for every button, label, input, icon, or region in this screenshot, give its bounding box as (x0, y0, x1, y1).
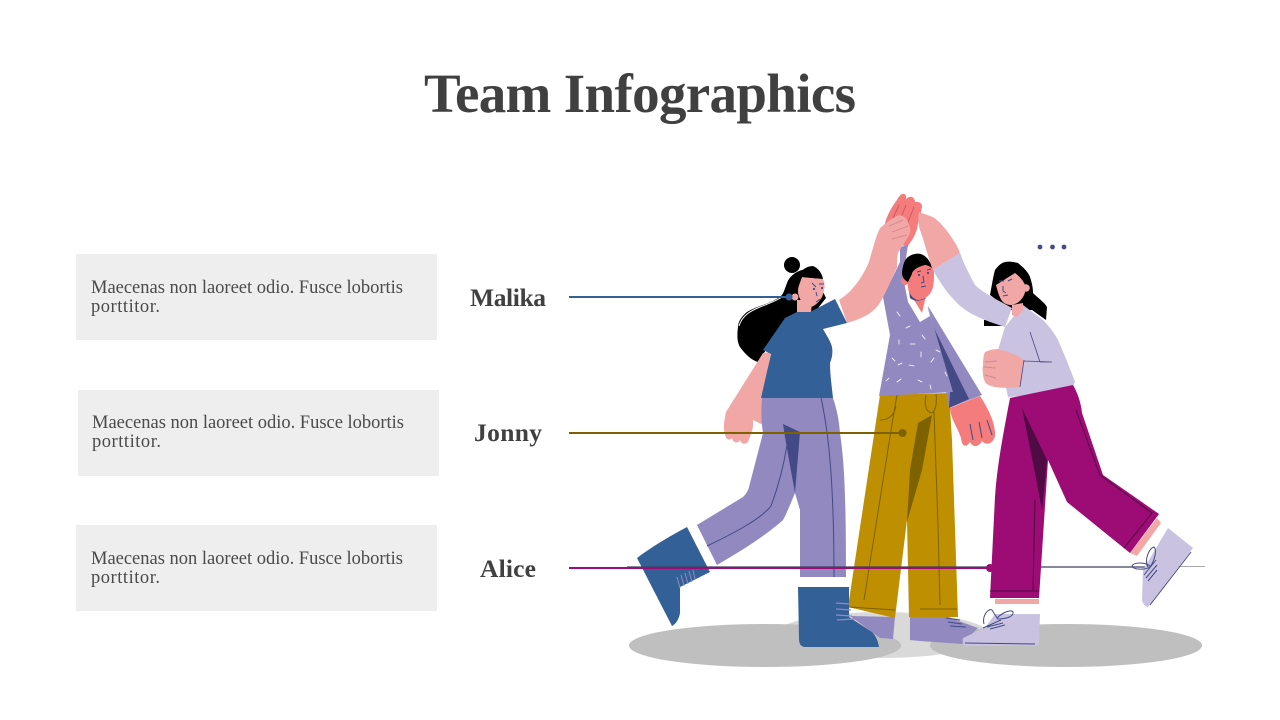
title: Team Infographics (424, 63, 856, 124)
Alice raised sleeve (933, 253, 1012, 327)
panel: Alice description (76, 525, 437, 611)
panel: Malika description (76, 254, 437, 340)
Alice front sock (995, 599, 1039, 604)
Alice lower hand (983, 349, 1024, 388)
Malika hair back (737, 270, 826, 362)
Alice face (999, 279, 1012, 296)
Malika back arm and hand (724, 352, 771, 444)
Malika hair top (793, 266, 823, 292)
panel: Malika description: Maecenas non laoreet odio. Fusce lobortis (91, 278, 403, 298)
Alice head (996, 273, 1025, 305)
Malika left boot (637, 527, 710, 626)
Alice hand raised (918, 212, 960, 270)
Jonny hair (902, 254, 932, 282)
Alice front shoe (963, 614, 1040, 646)
Jonny trousers (848, 393, 958, 618)
Malika raised arm (839, 215, 910, 323)
decorative dots (1038, 245, 1066, 249)
figure: Jonny (848, 194, 995, 644)
Jonny raised hand (885, 194, 922, 247)
Malika right boot (798, 587, 879, 647)
panel: Alice description: Maecenas non laoreet odio. Fusce lobortis (91, 549, 403, 569)
connector: Malika (569, 293, 793, 301)
figure: Malika (637, 215, 910, 647)
connector: Jonny (569, 429, 906, 437)
panel: Jonny description: porttitor. (92, 432, 161, 452)
Jonny sleeve (928, 306, 982, 408)
Malika trousers (697, 398, 846, 577)
ground shadows (629, 612, 1202, 667)
Jonny collar (908, 300, 930, 322)
Alice sleeve seams (1020, 332, 1052, 387)
Malika face (812, 283, 824, 302)
Jonny shoes (850, 616, 978, 644)
name: Alice: Alice (480, 554, 536, 583)
Jonny face (917, 269, 931, 287)
Alice back shoe (1142, 528, 1193, 607)
Alice neck (1012, 303, 1023, 317)
panel: Jonny description (78, 390, 439, 476)
name: Jonny: Jonny (474, 418, 542, 447)
Jonny head (908, 262, 934, 300)
panel: Malika description: porttitor. (91, 297, 160, 317)
Alice trousers (990, 385, 1159, 598)
Malika head (798, 277, 825, 307)
Malika neck (797, 300, 812, 314)
figure: Alice (918, 212, 1193, 646)
connector: Alice (569, 564, 994, 572)
background thin line (627, 566, 1150, 568)
Jonny neck (909, 292, 926, 313)
Jonny lowered hand (950, 396, 995, 446)
Alice back sock (1130, 518, 1161, 556)
panel: Alice description: porttitor. (91, 568, 160, 588)
Jonny sweater (879, 245, 953, 396)
Alice body (998, 305, 1075, 397)
name: Malika: Malika (470, 283, 546, 312)
Alice hair back (990, 262, 1047, 320)
Malika shirt (761, 299, 847, 398)
Malika bun (784, 257, 800, 273)
Jonny neck shadow (909, 291, 926, 301)
panel: Jonny description: Maecenas non laoreet odio. Fusce lobortis (92, 413, 404, 433)
